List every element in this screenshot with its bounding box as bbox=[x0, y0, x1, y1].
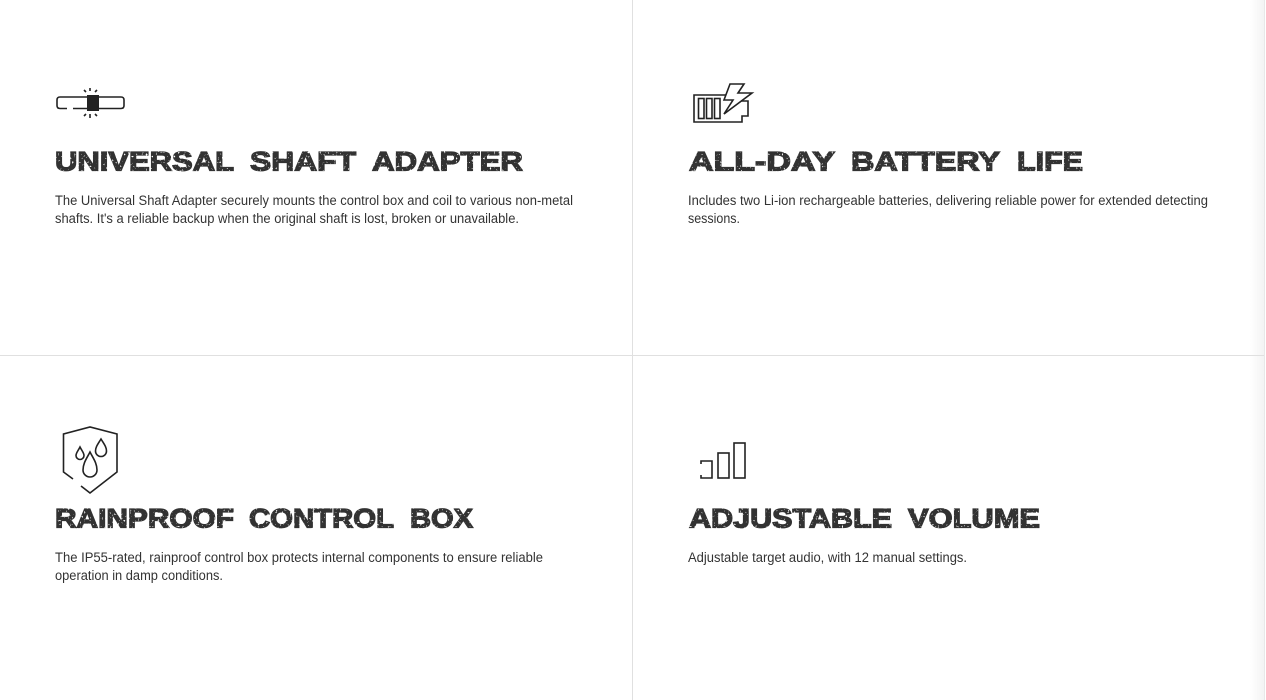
description bbox=[688, 193, 1208, 226]
icon: battery with lightning bolt bbox=[694, 84, 752, 122]
heading bbox=[55, 146, 523, 176]
heading: SHAFT bbox=[250, 146, 357, 176]
description: The IP55-rated, rainproof control box protects internal components to ensure reliable bbox=[55, 550, 543, 565]
panel: rainproof control box bbox=[55, 427, 543, 583]
heading: BATTERY bbox=[851, 146, 1000, 176]
heading: CONTROL bbox=[249, 504, 394, 534]
heading: ADJUSTABLE bbox=[689, 504, 892, 534]
icon: shaft adapter bbox=[57, 88, 124, 118]
heading: BOX bbox=[410, 504, 473, 534]
description bbox=[55, 193, 573, 226]
description: operation in damp conditions. bbox=[55, 568, 223, 583]
icon: volume bars bbox=[701, 443, 745, 478]
description: The Universal Shaft Adapter securely mounts the control box and coil to various non-metal bbox=[55, 193, 573, 208]
panel: all-day battery life bbox=[688, 84, 1208, 226]
description: Includes two Li-ion rechargeable batteries, delivering reliable power for extended detecting bbox=[688, 193, 1208, 208]
heading: LIFE bbox=[1017, 146, 1083, 176]
heading: UNIVERSAL bbox=[55, 146, 234, 176]
panel: adjustable volume bbox=[688, 443, 1040, 565]
description: shafts. It's a reliable backup when the original shaft is lost, broken or unavailable. bbox=[55, 211, 519, 226]
description: sessions. bbox=[688, 211, 740, 226]
heading: VOLUME bbox=[908, 504, 1040, 534]
heading: RAINPROOF bbox=[55, 504, 234, 534]
heading: ALL-DAY bbox=[689, 146, 835, 176]
heading: ADAPTER bbox=[372, 146, 523, 176]
heading bbox=[55, 504, 473, 534]
icon: shield with water drops bbox=[64, 427, 117, 493]
heading bbox=[689, 146, 1083, 176]
description bbox=[55, 550, 543, 583]
heading bbox=[689, 504, 1040, 534]
panel: universal shaft adapter bbox=[55, 88, 573, 226]
description: Adjustable target audio, with 12 manual settings. bbox=[688, 550, 967, 565]
